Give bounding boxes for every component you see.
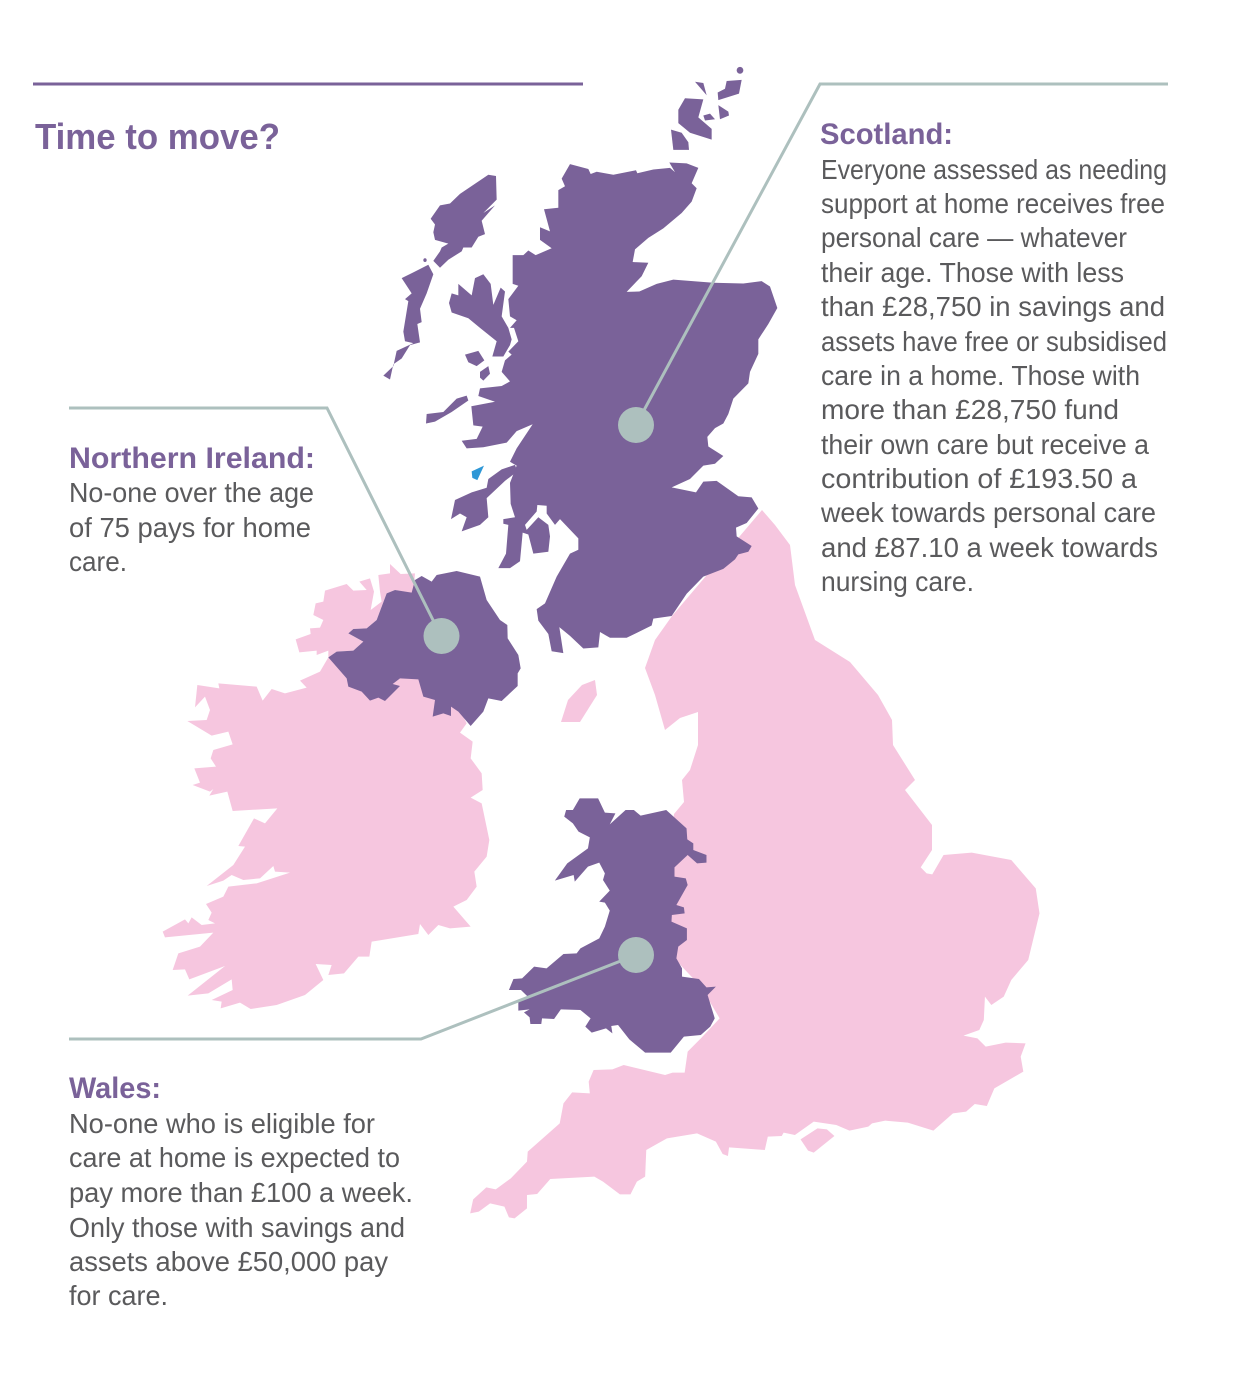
text: Scotland: nursing care.: [821, 566, 974, 597]
text: Northern Ireland: of 75 pays for home: [69, 512, 311, 543]
text: Northern Ireland: care.: [69, 546, 127, 577]
text: Wales: care at home is expected to: [69, 1142, 400, 1173]
text: Wales: Only those with savings and: [69, 1212, 405, 1243]
leader line: Scotland: [636, 84, 1168, 425]
text: Wales: assets above £50,000 pay: [69, 1246, 388, 1277]
text: Northern Ireland: [69, 477, 314, 577]
text: Scotland: assets have free or subsidised: [821, 326, 1167, 357]
callout: Scotland: [618, 84, 1168, 597]
text: Scotland: care in a home. Those with: [821, 360, 1140, 391]
marker: Wales: [618, 937, 654, 973]
region: England: [470, 510, 1040, 1218]
text: Scotland: contribution of £193.50 a: [821, 463, 1137, 494]
region: Northern Ireland: [328, 571, 521, 726]
text: Wales: [69, 1108, 413, 1311]
text: Scotland: personal care — whatever: [821, 222, 1127, 253]
text: Scotland: their own care but receive a: [821, 429, 1149, 460]
text: Scotland: than £28,750 in savings and: [821, 291, 1165, 322]
text: Scotland: and £87.10 a week towards: [821, 532, 1158, 563]
callout: Wales: [69, 937, 654, 1311]
region: Republic of Ireland: [163, 564, 489, 1009]
region: Wales: [509, 798, 716, 1053]
heading: Wales: Wales:: [69, 1072, 161, 1105]
island: Isle of Man: [561, 680, 597, 722]
text: Scotland: Everyone assessed as needing: [821, 154, 1167, 185]
text: Scotland: more than £28,750 fund: [821, 394, 1119, 425]
text: Wales: pay more than £100 a week.: [69, 1177, 413, 1208]
island: blue marker: [472, 466, 484, 480]
text: Wales: for care.: [69, 1280, 168, 1311]
marker: Northern Ireland: [424, 618, 460, 654]
leader line: Northern Ireland: [69, 408, 441, 636]
region: Scotland: [383, 67, 777, 653]
marker: Scotland: [618, 407, 654, 443]
map of UK and Ireland: [163, 67, 1040, 1218]
text: Scotland: their age. Those with less: [821, 257, 1124, 288]
callout: Northern Ireland: [69, 408, 460, 654]
text: Scotland: [820, 154, 1167, 597]
text: Scotland: support at home receives free: [821, 188, 1165, 219]
heading: Northern Ireland: Northern Ireland:: [69, 442, 315, 475]
island: Isle of Wight: [801, 1128, 834, 1153]
title: Time to move?: [35, 116, 280, 157]
title rule: [33, 82, 583, 86]
text: Scotland: week towards personal care: [820, 497, 1156, 528]
leader line: Wales: [69, 955, 636, 1039]
text: Northern Ireland: No-one over the age: [69, 477, 314, 508]
heading: Scotland: Scotland:: [820, 118, 953, 151]
text: Wales: No-one who is eligible for: [69, 1108, 375, 1139]
